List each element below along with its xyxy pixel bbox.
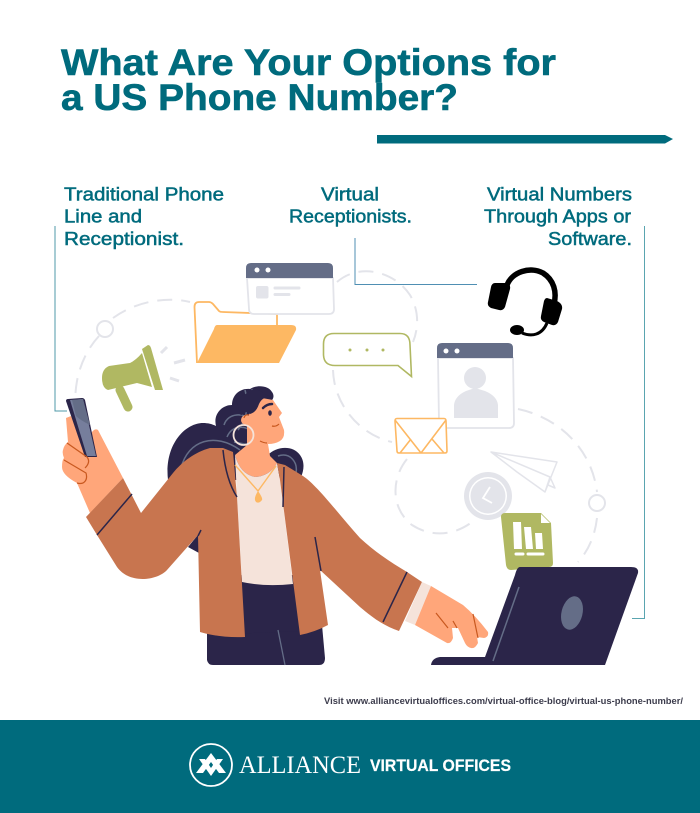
finger lines (64, 443, 89, 484)
right hand (415, 586, 488, 648)
label: virtual receptionists (289, 184, 412, 227)
dashed network paths (76, 271, 605, 562)
source url: Visit www.alliancevirtualoffices.com/virtual-office-blog/virtual-us-phone-number/ (324, 696, 683, 706)
dark underside (188, 530, 202, 553)
label: traditional phone line (64, 184, 224, 249)
icon: chat bubble (324, 334, 412, 376)
label: traditional phone line: Line and (64, 206, 142, 227)
left hand (62, 416, 123, 513)
connector: middle (355, 238, 477, 284)
jacket left and sleeve (86, 448, 245, 637)
title (61, 42, 556, 118)
label: traditional phone line: Traditional Phone (64, 184, 224, 205)
hair strands (181, 389, 296, 473)
logo emblem (190, 744, 232, 786)
icon: clock (464, 472, 512, 520)
label: virtual receptionists: Receptionists. (289, 206, 412, 227)
ear (241, 415, 251, 425)
jacket right and sleeve (277, 463, 422, 635)
pants (207, 625, 325, 665)
illustration: woman (62, 386, 488, 665)
connector: right (632, 226, 644, 618)
label: virtual numbers: Through Apps or (484, 206, 631, 227)
logo tagline: VIRTUAL OFFICES (370, 757, 511, 775)
icon: folder (194, 302, 296, 363)
logo name: ALLIANCE (239, 752, 361, 779)
footer band (0, 720, 700, 813)
neck and face (235, 398, 284, 477)
illustration: laptop (431, 567, 638, 665)
label: virtual numbers (484, 184, 632, 249)
title accent bar (377, 135, 673, 144)
hair fringe (236, 388, 272, 416)
label: virtual receptionists: Virtual (321, 184, 379, 205)
icon: chart document (501, 513, 553, 570)
label: virtual numbers: Software. (548, 228, 632, 249)
title: What Are Your Options for (61, 42, 556, 83)
shirt (235, 455, 293, 585)
icon: envelope (395, 418, 447, 453)
icon: headset (488, 270, 562, 335)
icon: paper plane (491, 452, 557, 492)
icon: megaphone (102, 345, 185, 407)
eyebrow and eye (263, 404, 272, 408)
hair back (168, 386, 304, 480)
icon: profile window (437, 343, 514, 428)
icon: browser window (246, 263, 334, 314)
footer logo (190, 744, 511, 786)
mouth and jaw line (244, 415, 279, 443)
cuff (405, 582, 431, 625)
phone (66, 398, 97, 457)
label: traditional phone line: Receptionist. (64, 228, 184, 249)
label: virtual numbers: Virtual Numbers (487, 184, 632, 205)
connector: left (55, 226, 67, 411)
earring (234, 425, 254, 445)
title: a US Phone Number? (61, 77, 458, 118)
jacket lines (97, 450, 407, 622)
necklace (235, 465, 276, 491)
